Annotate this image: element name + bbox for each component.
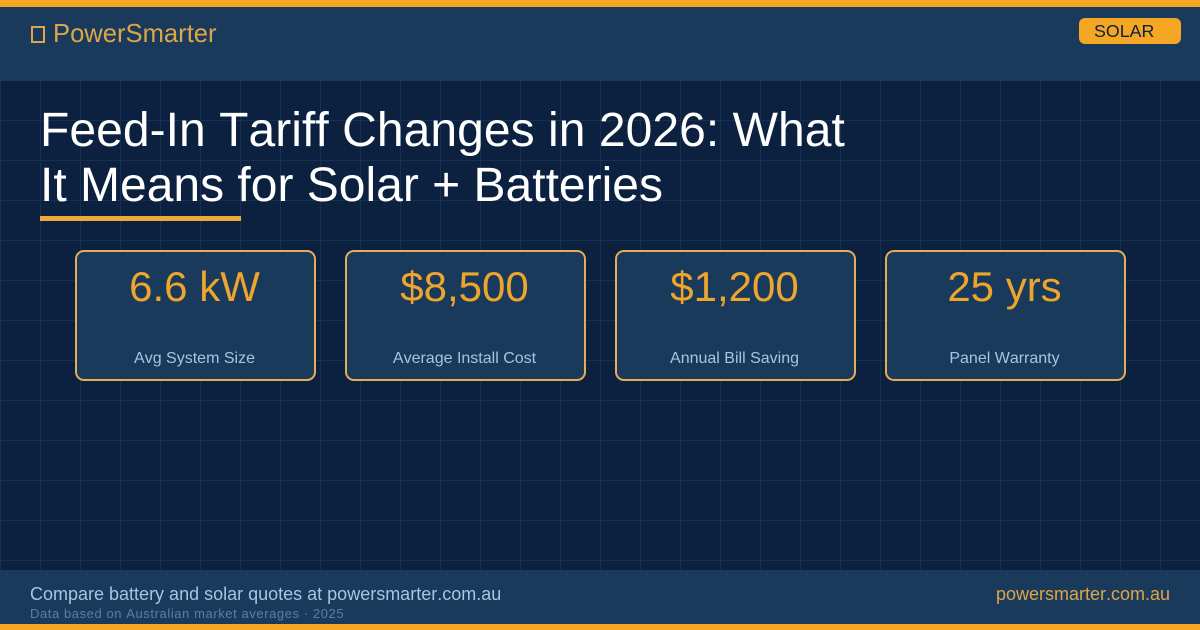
stat card: system size xyxy=(75,250,316,381)
label: Panel Warranty xyxy=(949,350,1060,367)
value: $1,200 xyxy=(670,263,799,310)
value: $8,500 xyxy=(400,263,529,310)
title xyxy=(40,104,845,212)
brand name: PowerSmarter xyxy=(53,20,217,48)
value: 25 yrs xyxy=(947,263,1062,310)
category badge: SOLAR xyxy=(1094,21,1154,41)
category badge xyxy=(1079,18,1181,44)
call to action: Compare battery and solar quotes at powersmarter.com.au xyxy=(30,584,501,604)
icon: logo placeholder box xyxy=(31,26,45,43)
stat card: install cost xyxy=(345,250,586,381)
label: Avg System Size xyxy=(134,350,255,367)
logo xyxy=(31,20,217,48)
stat card: bill saving xyxy=(615,250,856,381)
label: Average Install Cost xyxy=(393,350,536,367)
title underline xyxy=(40,216,241,221)
data source note: Data based on Australian market averages · 2025 xyxy=(30,606,344,621)
header bar xyxy=(0,0,1200,81)
title: It Means for Solar + Batteries xyxy=(40,159,663,212)
label: Annual Bill Saving xyxy=(670,350,799,367)
website: powersmarter.com.au xyxy=(996,584,1170,604)
title: Feed-In Tariff Changes in 2026: What xyxy=(40,104,845,157)
stat card: warranty xyxy=(885,250,1126,381)
value: 6.6 kW xyxy=(129,263,260,310)
footer bar xyxy=(0,570,1200,630)
